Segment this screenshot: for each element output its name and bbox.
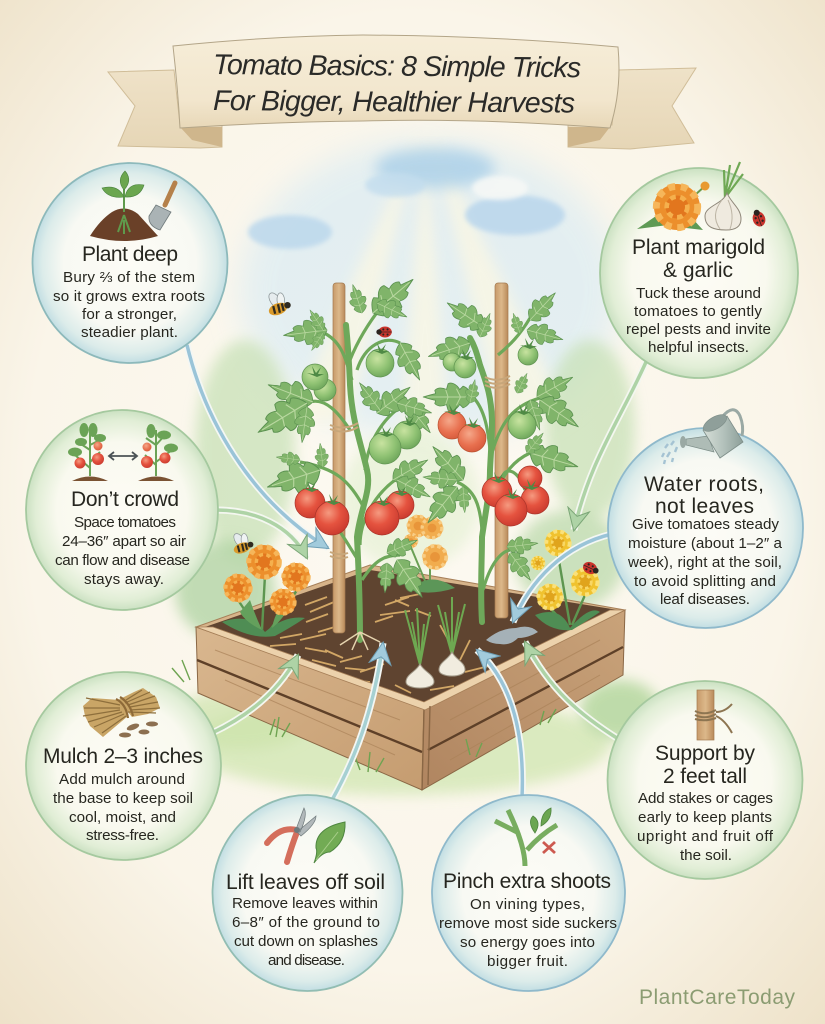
heading: Plant marigold [632,236,765,259]
body text [53,269,205,341]
panel: don't crowd [26,410,218,610]
heading: Don’t crowd [71,488,179,511]
heading: Mulch 2–3 inches [43,745,203,768]
right marigolds [531,530,601,630]
green tomatoes [443,353,461,371]
icon: bee lower [232,532,253,556]
body text [439,896,617,970]
body text: 24–36″ apart so air [62,533,186,550]
body text: and disease. [268,952,345,969]
top rim highlights [196,610,625,710]
arrow: marigold and garlic [574,362,646,530]
body text: the soil. [680,847,732,864]
heading [655,742,756,788]
leaves [522,286,563,327]
left marigolds [222,545,310,637]
body text: can flow and disease [55,552,190,569]
stakes [333,283,508,633]
body text: stress-free. [86,827,159,844]
raised wooden bed [172,565,625,790]
body text: Give tomatoes steady [632,516,779,533]
body text: cool, moist, and [69,809,176,826]
body text: early to keep plants [638,809,772,826]
puddle [486,627,538,644]
icon: ladybug on vine [376,326,392,338]
body text: Remove leaves within [232,895,378,912]
arrow: support [525,642,620,740]
red tomatoes [295,488,325,518]
logo: PlantCareToday: PlantCareToday [639,986,796,1009]
heading: & garlic [663,259,733,282]
roots [340,632,380,650]
body text: steadier plant. [81,324,178,341]
icon: seedling and trowel [90,171,175,241]
back rim [196,565,625,630]
body text [53,771,193,844]
arrow: lift leaves [332,643,383,800]
panel: support [608,681,802,879]
right face [422,610,625,790]
arrow: water roots [513,534,612,622]
heading: Plant deep [82,243,178,266]
body text: Add mulch around [59,771,185,788]
soil [205,570,618,706]
heading: 2 feet tall [663,765,747,788]
icon: marigold, garlic, ladybug [637,162,767,230]
arrow: plant deep [187,345,328,548]
garlic plants [405,597,465,688]
heading: Support by [655,742,756,765]
arrow: pinch shoots [477,650,522,798]
body text: cut down on splashes [234,933,378,950]
body text [626,285,771,356]
panel: water roots [608,410,803,628]
body text [55,514,190,588]
panel: mulch [26,672,221,860]
plank seams [197,647,623,752]
body text: repel pests and invite [626,321,771,338]
body text: for a stronger, [82,306,177,323]
icon: bee upper [266,291,291,318]
center marigolds [404,515,455,593]
red tomatoes [518,466,542,490]
body text: Add stakes or cages [638,790,773,807]
body text: Bury ⅔ of the stem [63,269,195,286]
tie [485,376,510,388]
title banner [173,35,619,128]
tomato plant: left [250,268,439,650]
body text [232,895,380,969]
title line 2: For Bigger, Healthier Harvests [213,85,575,120]
panel: pinch shoots [432,795,625,991]
icon: stem with sucker and X [495,808,557,866]
heading: Lift leaves off soil [226,871,385,894]
banner tails [108,68,696,149]
orange tomatoes [438,411,466,439]
body text: leaf diseases. [660,591,750,608]
body text [637,790,774,864]
left face [196,627,424,790]
soil texture and mulch [270,594,489,693]
body text: moisture (about 1–2″ a [628,535,783,552]
sky with clouds and sun rays [240,130,620,440]
tomato plant: right [418,286,586,622]
body text: Tuck these around [636,285,761,302]
body text: Space tomatoes [74,514,176,531]
background foliage wash [170,340,660,795]
ties [330,423,358,558]
heading: Water roots, [644,473,764,496]
body text: the base to keep soil [53,790,193,807]
body text: so energy goes into [460,934,595,951]
body text [627,516,783,608]
body text: to avoid splitting and [634,573,776,590]
body text: week), right at the soil, [627,554,782,571]
panel: lift leaves [212,795,402,991]
body text: tomatoes to gently [634,303,762,320]
body text: upright and fruit off [637,828,774,845]
body text: remove most side suckers [439,915,617,932]
icon: ladybug on marigold [581,560,601,577]
body text: bigger fruit. [487,953,568,970]
body text: On vining types, [470,896,585,913]
heading: not leaves [655,495,754,518]
body text: helpful insects. [648,339,749,356]
body text: stays away. [84,571,164,588]
arrow: mulch [212,655,298,733]
heading [632,236,765,282]
icon: straw bundle [83,688,160,738]
icon: pruners and leaf [267,808,345,863]
body text: so it grows extra roots [53,288,205,305]
icon: two spaced tomato plants [68,423,178,481]
grass tufts [172,660,556,772]
panel: marigold and garlic [600,162,798,378]
green tomatoes [314,379,336,401]
heading: Pinch extra shoots [443,870,611,893]
icon: stake with twine [695,690,732,740]
panel: plant deep [32,163,228,363]
body text: 6–8″ of the ground to [232,914,380,931]
title line 1: Tomato Basics: 8 Simple Tricks [213,49,581,84]
icon: watering can [662,410,743,464]
leaves [364,268,422,324]
arrow: don't crowd [216,510,307,558]
heading [644,473,764,518]
